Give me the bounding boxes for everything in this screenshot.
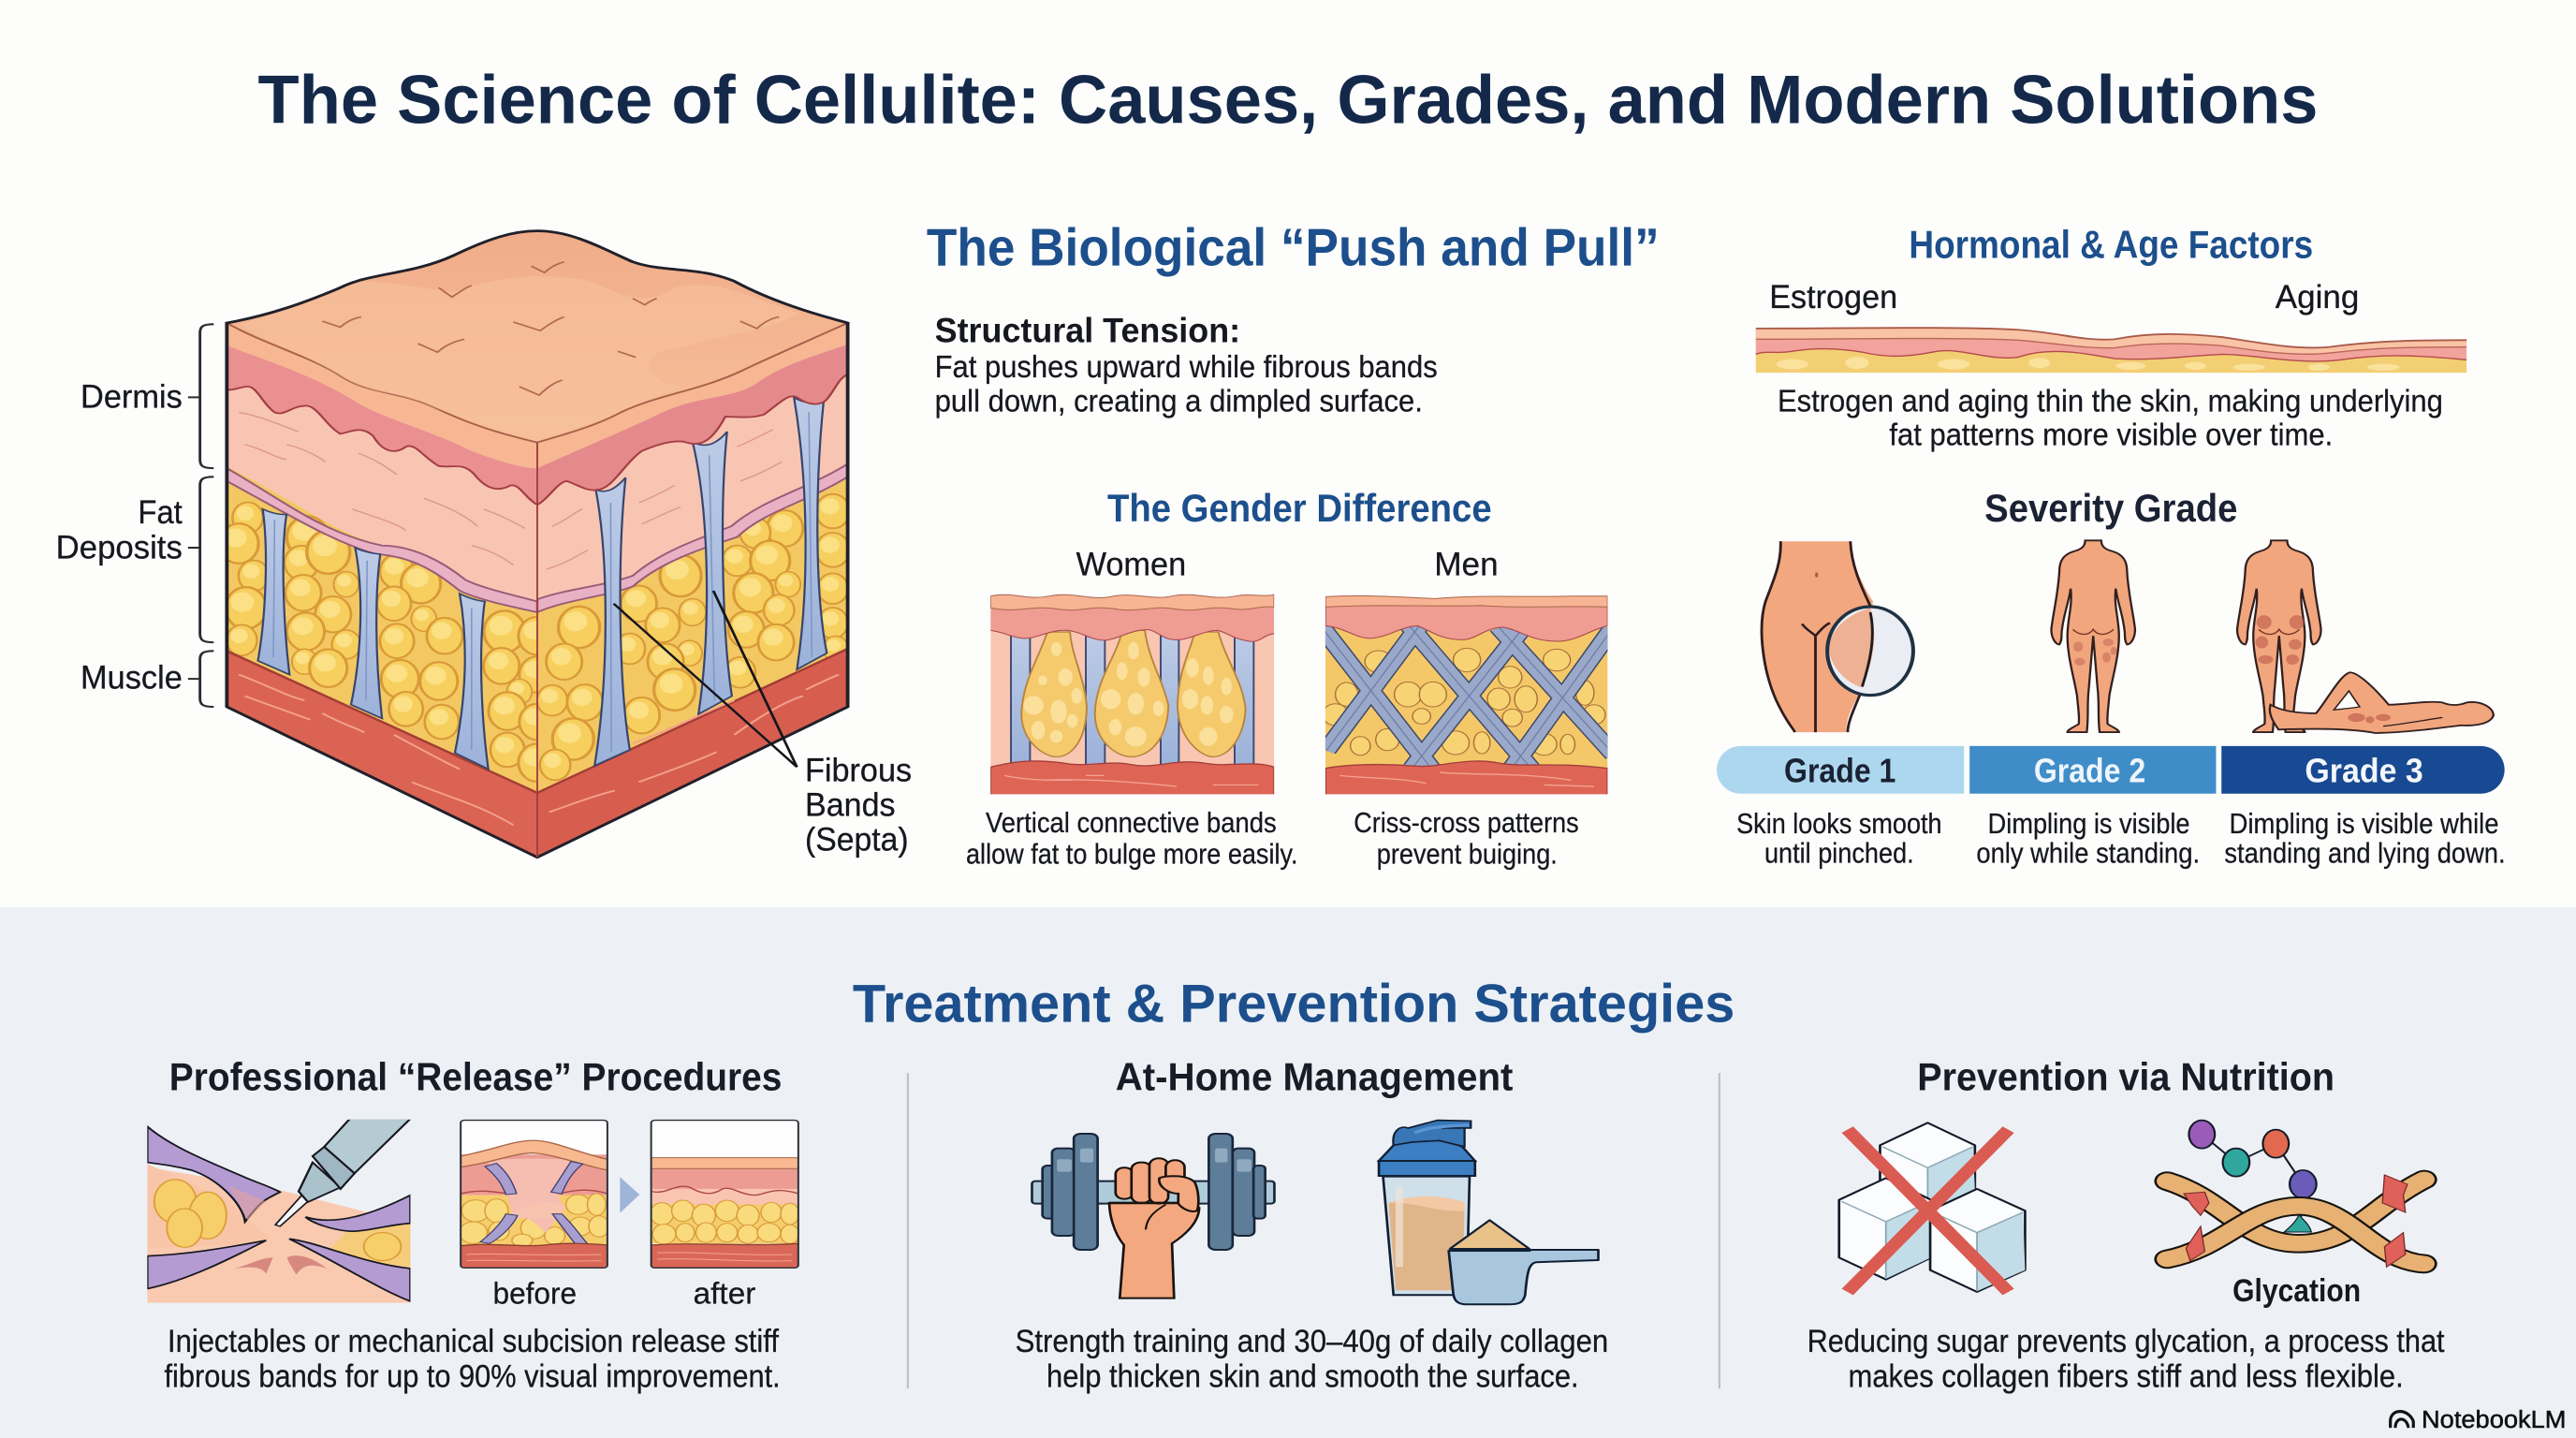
grade bar [1717, 746, 2505, 794]
text: grade 3 description: Dimpling is visible while [2230, 807, 2499, 840]
icon: transition arrow [620, 1177, 639, 1213]
illustration: women vertical bands [990, 594, 1274, 796]
layer: dermis left [227, 323, 537, 601]
text: men caption: Criss-cross patterns [1354, 806, 1579, 839]
icon: crossed-out sugar cubes [1839, 1123, 2025, 1292]
text: grade 1 description: until pinched. [1764, 836, 1914, 869]
grade labels: Grade 1 [1784, 751, 1895, 789]
illustration: men criss-cross bands [1322, 595, 1615, 796]
text: nutrition description [1808, 1324, 2445, 1394]
label: Fat Deposits: Deposits [56, 530, 183, 566]
text block: structural tension [935, 312, 1438, 418]
icon: protein shaker and scoop [1379, 1121, 1599, 1304]
label: Fibrous Bands (Septa) [805, 753, 912, 858]
text: nutrition description: Reducing sugar prevents glycation, a process that [1808, 1324, 2445, 1359]
text: grade 2 description: Dimpling is visible [1988, 807, 2190, 840]
grade 2 segment [1969, 746, 2216, 794]
panel: treatment and prevention background [0, 907, 2576, 1438]
layer: skin surface [227, 323, 848, 468]
panel: hormonal and age factors [1756, 224, 2466, 453]
heading: Severity Grade: Severity Grade [1984, 487, 2237, 530]
text: procedures description: fibrous bands for up to 90% visual improvement. [165, 1358, 781, 1394]
layer: pink dermis top [227, 345, 537, 505]
label: Muscle: Muscle [80, 659, 183, 696]
text block: structural tension: pull down, creating a dimpled surface. [935, 384, 1423, 418]
panel: gender difference [966, 487, 1615, 870]
heading: The Gender Difference: The Gender Difference [1107, 487, 1492, 530]
label: Fibrous Bands (Septa): Bands [805, 786, 896, 823]
illustrations: grade figures [1762, 540, 2494, 733]
text: hormonal caption [1778, 385, 2443, 453]
label: Fibrous Bands (Septa): Fibrous [805, 753, 912, 789]
label: Fat Deposits [56, 494, 183, 566]
text: at-home description: Strength training and 30–40g of daily collagen [1016, 1324, 1608, 1359]
illustration: thinning skin strip [1756, 328, 2466, 373]
text: grade 3 description: standing and lying down. [2224, 836, 2506, 869]
grade 1 segment [1717, 746, 1964, 794]
illustrations [147, 1119, 799, 1303]
label: Fat Deposits: Fat [138, 494, 183, 531]
text: hormonal caption: fat patterns more visible over time. [1889, 418, 2333, 453]
label: Men: Men [1434, 546, 1499, 582]
bracket: dermis [188, 324, 797, 767]
grade labels [1784, 751, 2423, 789]
icon: grade 1 torso with magnifier [1762, 541, 1913, 732]
heading: At-Home Management [1116, 1055, 1513, 1099]
text: procedures description: Injectables or mechanical subcision release stiff [168, 1324, 779, 1359]
label: Women: Women [1076, 546, 1186, 582]
label: Dermis: Dermis [80, 378, 183, 415]
label: Fibrous Bands (Septa): (Septa) [805, 821, 909, 858]
layer: muscle [227, 651, 537, 858]
panel: professional release procedures [147, 1055, 799, 1394]
text: women caption: Vertical connective bands [986, 806, 1277, 839]
label: Estrogen: Estrogen [1769, 279, 1897, 315]
text: procedures description [165, 1324, 781, 1394]
illustration: 3D skin block [219, 231, 850, 858]
label: before: before [493, 1277, 577, 1311]
heading: Prevention via Nutrition [1917, 1055, 2334, 1099]
panel: severity grade [1717, 487, 2506, 869]
cube outline [227, 231, 848, 858]
text: women caption: allow fat to bulge more easily. [966, 837, 1298, 870]
grade labels: Grade 2 [2034, 751, 2145, 789]
panel: prevention via nutrition [1808, 1055, 2445, 1394]
heading: Hormonal & Age Factors: Hormonal & Age Factors [1909, 224, 2313, 267]
icon: grade 2 standing figure [2051, 540, 2135, 732]
text: hormonal caption: Estrogen and aging thin the skin, making underlying [1778, 385, 2443, 419]
text: grade 1 description [1736, 807, 1942, 869]
illustration: needle release [147, 1119, 410, 1303]
icon: grade 3 reclining figure [2270, 672, 2494, 733]
text: grade 3 description [2224, 807, 2506, 869]
layer: dermis right [537, 323, 848, 599]
heading: Treatment & Prevention Strategies: Treatment & Prevention Strategies [853, 975, 1734, 1034]
title: The Science of Cellulite: Causes, Grades, and Modern Solutions [258, 61, 2318, 139]
illustration: before frame [460, 1121, 609, 1268]
illustration: after frame [651, 1121, 799, 1268]
label: after: after [694, 1277, 756, 1311]
text: grade 2 description [1976, 807, 2200, 869]
text: men caption [1354, 806, 1579, 870]
heading: Professional “Release” Procedures [169, 1055, 782, 1099]
text: men caption: prevent buiging. [1377, 837, 1558, 870]
text block: structural tension: Structural Tension: [935, 312, 1240, 350]
text: at-home description [1016, 1324, 1608, 1394]
panel: skin cross-section diagram [56, 231, 912, 858]
text block: structural tension: Fat pushes upward while fibrous bands [935, 350, 1438, 385]
icon: dumbbell in hand [1032, 1134, 1274, 1299]
text: grade 1 description: Skin looks smooth [1736, 807, 1942, 840]
text: grade 2 description: only while standing. [1976, 836, 2200, 869]
icon: glycation collagen fibres [2167, 1121, 2424, 1267]
label: Glycation: Glycation [2232, 1273, 2361, 1309]
grade labels: Grade 3 [2305, 751, 2423, 789]
text: nutrition description: makes collagen fibers stiff and less flexible. [1848, 1358, 2404, 1394]
heading: The Biological Push and Pull: The Biological “Push and Pull” [927, 217, 1660, 276]
logo: NotebookLM: NotebookLM [2422, 1405, 2566, 1433]
needle [275, 1194, 308, 1226]
fibrous bands in the fat layer [258, 397, 827, 770]
text: women caption [966, 806, 1298, 870]
text: at-home description: help thicken skin and smooth the surface. [1046, 1358, 1579, 1394]
grade 3 segment [2221, 746, 2505, 794]
icon: grade 3 standing figure [2237, 540, 2321, 732]
label: Aging: Aging [2276, 279, 2359, 315]
panel: at-home management [1016, 1055, 1608, 1394]
